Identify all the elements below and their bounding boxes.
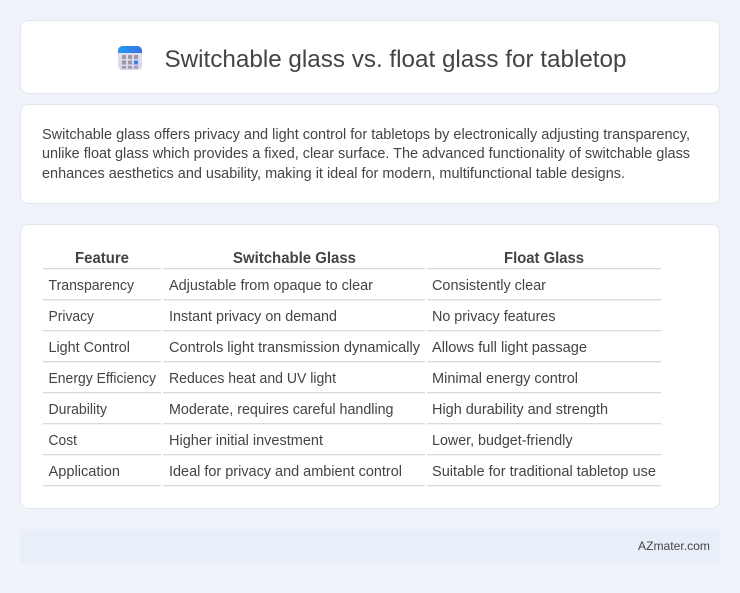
row: cost: Cost: [48, 433, 77, 449]
row: durability: Moderate, requires careful handling: [169, 402, 394, 418]
row: privacy: No privacy features: [432, 309, 556, 325]
summary text: Switchable glass offers privacy and light control for tabletops by electronically adjusting transparency,: [42, 127, 690, 143]
row: energy efficiency: Energy Efficiency: [48, 371, 157, 387]
row: light control: Allows full light passage: [432, 340, 587, 356]
icon: calendar: [118, 46, 142, 70]
row: transparency: Consistently clear: [432, 278, 546, 294]
table header row: Feature: [75, 250, 129, 267]
row: privacy: Privacy: [48, 309, 95, 325]
panel: comparison table: [20, 224, 720, 508]
row: application: Suitable for traditional tabletop use: [432, 464, 656, 480]
row: application: Application: [48, 464, 120, 480]
row: light control: [48, 340, 587, 356]
row: durability: High durability and strength: [432, 402, 608, 418]
row: transparency: [48, 278, 546, 294]
row: cost: [48, 433, 573, 449]
row: durability: Durability: [48, 402, 108, 418]
panel: title header: [20, 20, 720, 94]
row: light control: Light Control: [48, 340, 130, 356]
footer: [20, 529, 720, 563]
title: Switchable glass vs. float glass for tabletop: [164, 46, 626, 73]
row: cost: Lower, budget-friendly: [432, 433, 573, 449]
summary text: enhances aesthetics and usability, making it ideal for modern, multifunctional table designs.: [42, 166, 625, 182]
row: light control: Controls light transmission dynamically: [169, 340, 421, 356]
row: energy efficiency: Minimal energy control: [432, 371, 578, 387]
row: energy efficiency: Reduces heat and UV light: [169, 371, 336, 387]
panel: summary: [20, 104, 720, 204]
footer: AZmater.com: [638, 539, 710, 553]
summary text: unlike float glass which provides a fixed, clear surface. The advanced functionality of switchable glass: [42, 146, 690, 162]
row: energy efficiency: [48, 371, 578, 387]
row: privacy: Instant privacy on demand: [169, 309, 337, 325]
table header row: [75, 250, 584, 267]
summary text: [42, 127, 690, 182]
row: transparency: Transparency: [48, 278, 135, 294]
row: application: [48, 464, 656, 480]
row: cost: Higher initial investment: [169, 433, 323, 449]
row: application: Ideal for privacy and ambient control: [169, 464, 402, 480]
table header row: Float Glass: [504, 250, 584, 267]
table header row: Switchable Glass: [233, 250, 356, 267]
row: privacy: [48, 309, 556, 325]
row: durability: [48, 402, 608, 418]
row: transparency: Adjustable from opaque to clear: [169, 278, 373, 294]
